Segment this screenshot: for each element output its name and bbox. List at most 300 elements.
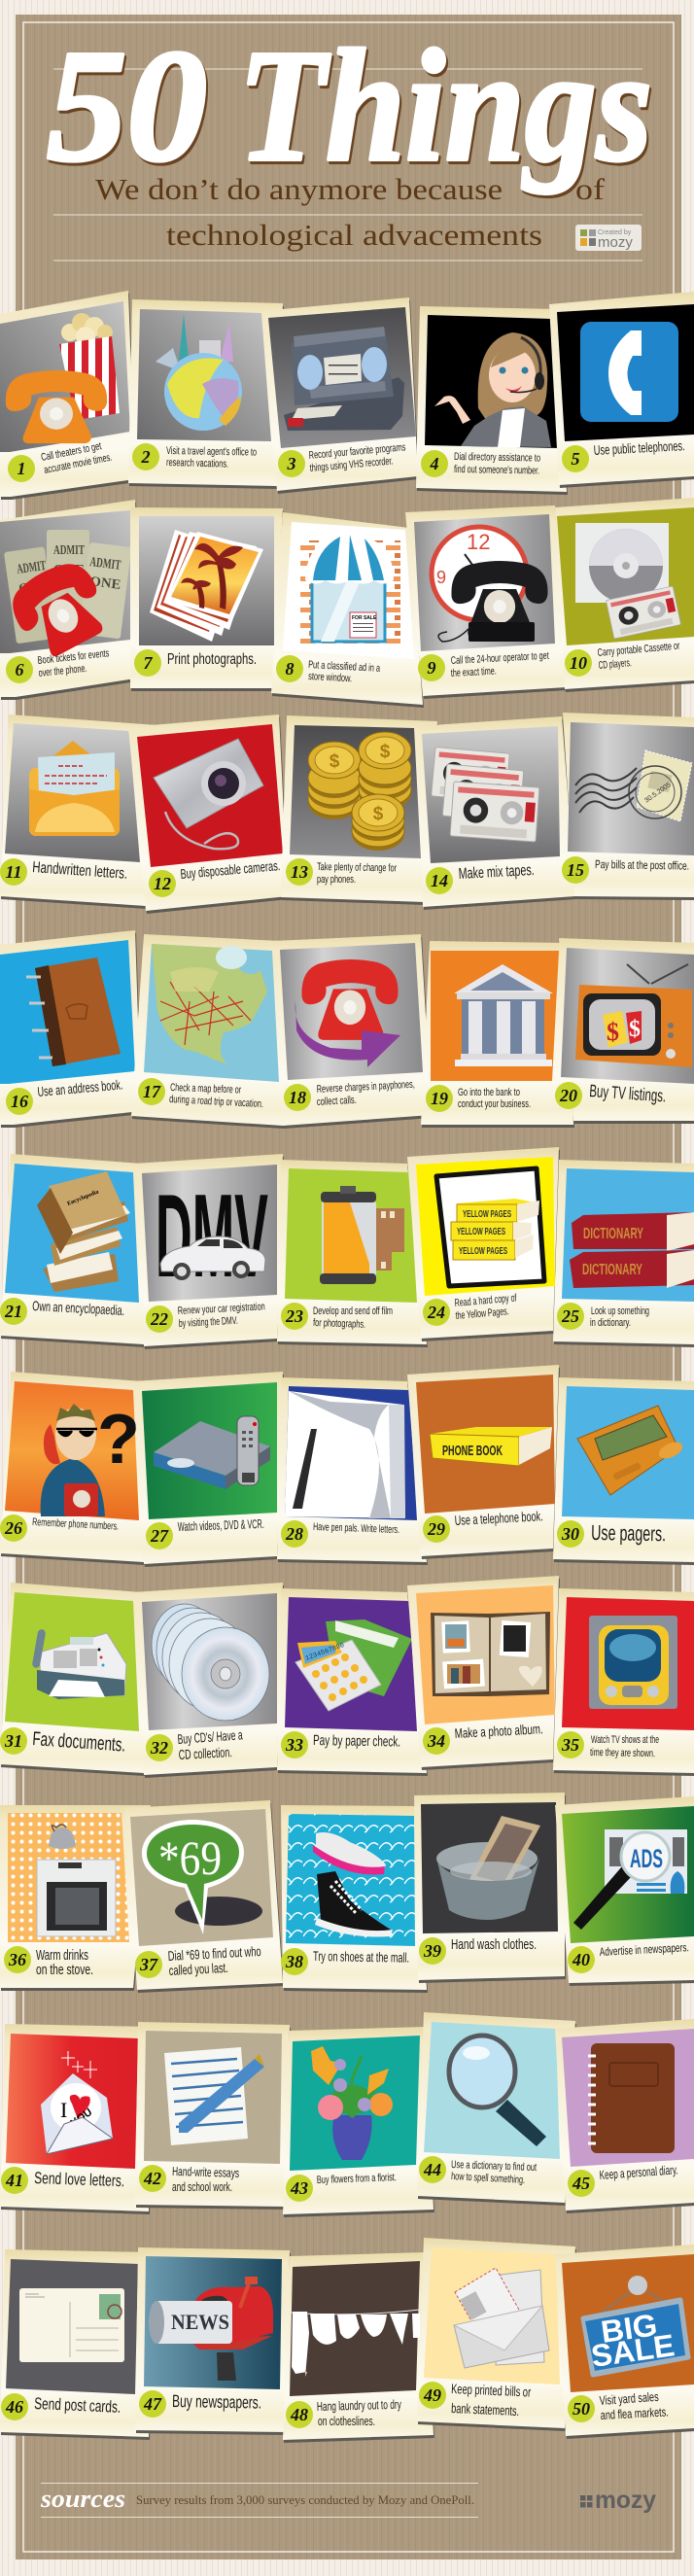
number 44: 44 [423,2160,441,2179]
number 41: 41 [5,2171,23,2190]
caption 8: Put a classified ad in a [308,659,381,675]
icon: fax machine [32,1629,126,1699]
icon: sneakers [313,1832,393,1936]
photo 22 [142,1165,277,1302]
number 4 [421,450,448,477]
card 15 [562,713,694,897]
icon: phone and popcorn [6,313,120,443]
caption 24: the Yellow Pages. [455,1305,509,1322]
icon: dictionaries: DICTIONARY [582,1262,642,1278]
card 22 [133,1154,283,1346]
icon: flower vase [311,2046,393,2160]
number 11 [0,858,27,886]
number 25 [557,1303,584,1330]
photo 26 [5,1381,139,1520]
caption 9: the exact time. [451,666,497,679]
number 16 [6,1088,33,1115]
card 7 [130,507,283,688]
number 50: 50 [573,2399,590,2419]
logo: mozy: mozy [595,2487,656,2514]
heading: sources: sources [40,2485,125,2513]
card 17 [131,934,283,1126]
icon: phone book: PHONE BOOK [442,1443,503,1459]
photo 46 [6,2259,138,2394]
icon: tickets and phone: ONE [89,574,121,593]
photo 1 [0,301,130,452]
photo 20 [561,948,694,1084]
caption 32 [177,1726,243,1762]
photo 15 [568,722,694,855]
card 36 [0,1805,151,1988]
icon: calculator and folder: 1234567890 [304,1642,346,1663]
number 42: 42 [143,2169,161,2188]
icon: globe [156,314,242,431]
caption 48: Hang laundry out to dry [317,2397,401,2414]
caption 17: during a road trip or vacation. [169,1094,263,1110]
icon: magnifier over ads: ADS [630,1844,663,1873]
icon: store window with awning: FOR SALE [352,615,377,621]
number 29: 29 [427,1519,445,1539]
caption 3 [308,441,406,474]
icon: film canister [320,1186,404,1284]
number 32 [146,1734,173,1761]
number 49 [419,2382,446,2409]
number 45: 45 [572,2174,590,2193]
badge: created by mozy: mozy [598,234,633,251]
heading: 50 Things: Things [238,17,652,194]
icon: mailbox with news [149,2277,273,2381]
caption 42: Hand-write essays [172,2164,240,2180]
icon: tickets and phone: ONE [53,563,85,577]
caption 32: CD collection. [178,1744,232,1762]
number 5: 5 [572,449,579,469]
caption 2 [166,445,257,470]
caption 25: in dictionary. [590,1317,631,1329]
number 15 [562,856,589,884]
number 1: 1 [17,459,25,478]
card 49 [417,2238,575,2428]
caption 32: Buy CD's/ Have a [177,1726,243,1747]
icon: tickets and phone: ONE [17,578,49,597]
number 35 [557,1731,584,1758]
caption 35: time they are shown. [590,1747,655,1759]
caption 37: Dial *69 to find out who [167,1943,261,1964]
subtitle of: of [575,172,606,206]
number 2 [132,443,159,470]
badge: created by mozy [575,225,642,251]
icon: magnifying glass [449,2036,546,2146]
caption 19 [458,1087,531,1110]
caption 9: Call the 24-hour operator to get [451,650,549,667]
number 44 [419,2156,446,2183]
icon: printed photos [150,530,263,642]
icon: mix tapes [432,748,539,842]
number 48: 48 [290,2405,308,2424]
number 29 [423,1515,450,1543]
photo 34 [416,1585,555,1724]
number 40: 40 [572,1950,590,1969]
photo 41 [6,2034,138,2169]
caption 6: over the phone. [38,663,87,679]
card 46 [0,2249,151,2437]
caption 23 [313,1305,393,1331]
card 33 [277,1588,427,1773]
photo 40 [562,1806,694,1943]
badge: created by mozy: Created by [598,229,632,236]
caption 38: Try on shoes at the mall. [313,1948,409,1966]
number 39 [419,1937,446,1965]
icon: bank [454,964,553,1066]
card 9 [405,505,567,696]
card 40 [555,1796,694,1983]
icon: CD and cassette [575,523,681,639]
photo 36 [8,1813,129,1942]
number 32: 32 [150,1738,168,1758]
icon: love letter: YOU [69,2106,94,2129]
caption 24: Read a hard copy of [454,1292,518,1309]
icon: TV with prices: $ [607,1018,619,1046]
photo 37 [130,1809,273,1946]
caption 10: CD players. [598,657,632,672]
card 37 [124,1800,283,1990]
icon: clock and black phone [432,527,548,642]
caption 19: Go into the bank to [458,1087,520,1098]
number 27: 27 [150,1526,169,1546]
photo 33 [285,1597,417,1731]
caption 27: Watch videos, DVD & VCR. [178,1516,264,1534]
number 9 [418,654,445,681]
number 48 [286,2401,313,2428]
caption 13: pay phones. [317,874,356,886]
caption 21: Own an encyclopaedia. [32,1298,125,1318]
number 4: 4 [430,454,439,473]
number 42 [139,2165,166,2192]
number 28 [281,1520,308,1548]
number 30: 30 [561,1524,579,1544]
card 10 [555,498,694,689]
number 17 [138,1078,165,1105]
icon: paper and pen [164,2047,264,2145]
number 21 [0,1298,27,1325]
photo 13 [290,725,421,858]
caption 6: Book tickets for events [37,647,110,667]
card 48 [283,2252,434,2440]
number 28: 28 [285,1524,303,1544]
caption 6 [37,647,110,679]
number 14 [426,867,453,894]
card 45 [555,2019,694,2210]
card 29 [407,1365,559,1556]
caption 9 [451,650,549,679]
photo 29 [416,1375,555,1514]
icon: road map [152,944,267,1064]
number 14: 14 [431,871,448,890]
card 47 [135,2247,290,2432]
number 46 [1,2393,28,2420]
number 7: 7 [144,653,154,673]
card 4 [416,306,567,492]
photo 6 [0,510,130,653]
icon: clock and black phone: 12 [467,530,490,554]
source text: Survey results from 3,000 surveys conducted by Mozy and OnePoll. [136,2492,474,2507]
caption 3: Record your favorite programs [308,441,406,462]
caption 48 [317,2397,401,2428]
title block [47,17,652,261]
number 34: 34 [427,1731,445,1751]
number 7 [134,649,161,677]
number 8: 8 [286,659,294,679]
number 47 [139,2390,166,2418]
photo 28 [285,1386,417,1520]
number 24 [423,1299,450,1326]
photo 25 [562,1168,694,1302]
number 6 [6,656,33,683]
caption 18 [317,1079,415,1108]
card 42 [135,2022,290,2207]
number 20 [555,1082,582,1109]
caption 39: Hand wash clothes. [451,1936,537,1953]
number 47: 47 [143,2394,162,2414]
icon: tickets and phone: ADMIT [53,543,85,558]
card 20 [555,938,694,1121]
caption 28: Have pen pals. Write letters. [313,1521,399,1536]
icon: TV with prices [575,964,692,1067]
caption 17: Check a map before or [170,1082,241,1097]
card 32 [133,1583,283,1775]
photo 48 [290,2261,420,2396]
caption 41: Send love letters. [34,2169,124,2190]
number 31 [0,1727,27,1755]
caption 23: Develop and send off film [313,1305,393,1317]
caption 35 [590,1734,659,1759]
caption 16: Use an address book. [37,1076,123,1099]
caption 7: Print photographs. [167,651,257,668]
caption 23: for photographs. [313,1317,365,1331]
caption 49: bank statements. [451,2400,520,2419]
number 10 [565,649,592,677]
photo 17: map [144,944,279,1082]
icon: love letter: I [60,2098,67,2122]
icon: stove and kettle [37,1825,116,1936]
icon: big sale sign [583,2276,688,2375]
icon: coin stacks: $ [380,742,391,762]
number 37 [135,1951,162,1978]
icon: operator woman [434,332,551,447]
number 23 [281,1303,308,1330]
card 38 [281,1805,427,1990]
caption 8 [308,659,381,684]
icon: telephone sign [580,322,678,422]
number 26 [0,1514,27,1542]
icon: love letter [41,2051,113,2154]
caption 25 [590,1305,649,1329]
number 3 [278,450,305,477]
photo 7 [139,516,274,645]
card 24 [407,1147,559,1339]
number 19: 19 [431,1089,448,1108]
number 9: 9 [428,658,435,678]
photo 12 [137,724,283,867]
number 18 [284,1084,311,1111]
icon: diary [588,2043,675,2153]
card 12 [128,714,288,911]
photo 27 [142,1382,277,1519]
photo 35 [562,1597,694,1730]
number 15: 15 [567,860,584,880]
number 43: 43 [290,2178,308,2198]
caption 44: how to spell something. [451,2171,525,2186]
caption 50: Visit yard sales [599,2389,659,2408]
caption 36: on the stove. [36,1962,93,1978]
icon: mailbox with news: NEWS [171,2310,229,2334]
caption 49 [451,2381,532,2419]
number 49: 49 [423,2385,441,2405]
photo 21 [5,1164,139,1303]
subtitle line 1: We don’t do anymore because [95,172,503,206]
caption 37: called you last. [168,1960,228,1978]
photo 9 [414,514,555,651]
caption 10 [597,641,680,672]
number 38: 38 [285,1952,303,1971]
caption 26: Remember phone numbers. [32,1516,119,1533]
icon: coin stacks: $ [330,751,340,772]
icon: dictionaries: DICTIONARY [583,1226,643,1242]
caption 18: Reverse charges in payphones, [317,1079,415,1096]
caption 1: Call theaters to get [40,440,102,464]
card 18 [272,934,432,1126]
number 22: 22 [150,1309,168,1329]
photo 10 [557,507,694,645]
caption 42 [172,2164,240,2194]
icon: stamp and postmark: 30.5.2005 [643,782,673,805]
number 16: 16 [11,1092,28,1111]
photo 30 [562,1386,694,1519]
number 39: 39 [423,1941,441,1961]
caption 44: Use a dictionary to find out [451,2159,537,2174]
number 13 [286,858,313,886]
caption 36: Warm drinks [36,1947,88,1964]
photo 5 [557,304,694,441]
number 40 [568,1946,595,1973]
icon: person with question mark [41,1401,140,1516]
photo 19 [431,951,559,1081]
caption 42: and school work. [172,2179,232,2194]
number 12 [149,870,176,897]
number 50 [568,2395,595,2422]
number 1 [8,455,35,482]
photo 16 [0,940,135,1084]
icon: big sale sign: BIG [599,2307,659,2350]
number 27 [146,1522,173,1549]
photo 4 [425,315,559,448]
card 13 [281,715,437,902]
icon: bills and envelopes [454,2268,549,2368]
photo 31 [5,1592,139,1731]
card 1 [0,291,135,497]
caption 4: Dial directory assistance to [454,451,540,465]
card 5 [549,292,694,485]
caption 1 [40,440,113,476]
number 19 [426,1085,453,1112]
caption 13: Take plenty of change for [317,861,397,874]
caption 47: Buy newspapers. [172,2391,261,2413]
caption 1: accurate movie times. [43,452,113,476]
number 25: 25 [561,1306,579,1326]
caption 31: Fax documents. [32,1728,126,1757]
caption 37 [167,1943,261,1978]
number 34 [423,1727,450,1755]
card 34 [407,1576,559,1767]
photo 11 [5,723,140,862]
number 21: 21 [4,1302,22,1321]
card 23 [277,1160,427,1344]
number 3: 3 [286,454,295,473]
icon: big sale sign: SALE [589,2327,677,2374]
icon: coin stacks: $ [373,804,384,824]
icon: phone book [430,1427,552,1466]
number 23: 23 [285,1306,303,1326]
caption 2: Visit a travel agent's office to [166,445,257,459]
icon: calculator and folder [295,1619,412,1711]
photo 39 [421,1802,558,1933]
number 43 [286,2175,313,2202]
icon: photo album [431,1612,550,1696]
icon: clothesline [292,2310,420,2377]
photo 8 [283,522,414,659]
card 21 [0,1154,144,1344]
photo 49 [424,2247,560,2385]
number 46: 46 [5,2397,23,2417]
number 20: 20 [559,1086,577,1105]
number 45 [568,2170,595,2197]
icon: yellow pages: YELLOW PAGES [459,1246,507,1257]
photo 24 [416,1157,555,1296]
icon: tickets and phone: ADMIT [89,555,122,574]
number 5 [562,445,589,472]
icon: clock and black phone: 9 [436,568,446,587]
photo 2 [137,309,271,441]
caption 2: research vacations. [166,457,228,470]
card 27 [133,1372,283,1564]
subtitle line 2: technological advacements [166,218,542,252]
icon: postcard [19,2288,124,2362]
number 24: 24 [427,1303,445,1322]
caption 44 [451,2159,537,2186]
caption 19: conduct your business. [458,1098,531,1110]
heading: 50 Things: 50 [47,17,207,194]
photo 45 [562,2029,694,2167]
card 41 [0,2024,151,2211]
caption 8: store window. [308,671,352,684]
caption 12: Buy disposable cameras. [180,857,281,882]
card 31 [0,1583,144,1773]
footer: sources [40,2483,656,2518]
card 11 [0,714,157,906]
photo 42 [144,2031,282,2164]
icon: *69 speech bubble [142,1820,262,1934]
card 43 [283,2027,434,2214]
caption 36 [36,1947,93,1978]
card 19 [421,941,573,1125]
number 6: 6 [16,660,23,679]
photo 43 [290,2036,420,2171]
icon: magnifier over ads [573,1829,687,1930]
caption 29: Use a telephone book. [454,1508,543,1528]
icon: encyclopedia stack [37,1171,130,1292]
number 30 [557,1520,584,1548]
caption 4: find out someone's number. [454,464,539,477]
card 50 [555,2245,694,2436]
